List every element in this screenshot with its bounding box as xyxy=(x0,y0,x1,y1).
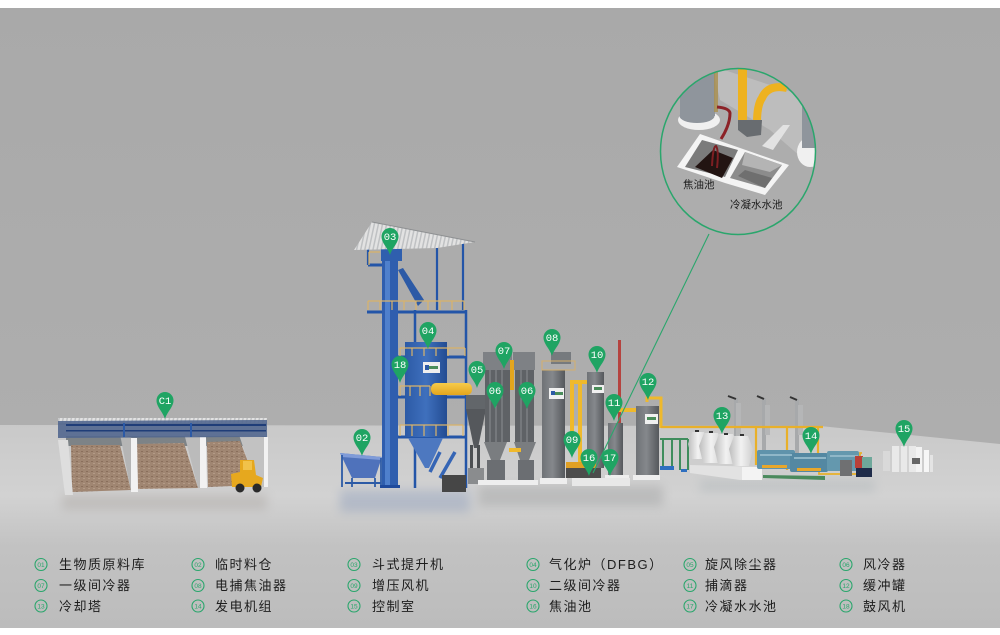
equipment: cooling towers xyxy=(688,430,762,480)
marker 03 xyxy=(382,228,398,255)
legend column 3: 15 xyxy=(350,604,358,610)
marker 17: 17 xyxy=(604,453,616,465)
marker 04: 04 xyxy=(422,326,434,338)
legend column 2: 电捕焦油器 xyxy=(215,578,288,593)
marker C1: C1 xyxy=(159,396,171,408)
marker 06 right: 06 xyxy=(521,386,533,398)
inset label: tar pool: 焦油池 xyxy=(683,178,715,191)
ash bin xyxy=(442,475,466,492)
legend column 6: 18 xyxy=(842,604,850,610)
yellow duct xyxy=(431,383,472,395)
equipment: green pipe rack xyxy=(660,439,688,472)
top margin xyxy=(0,0,1000,8)
equipment: control room xyxy=(883,446,933,472)
legend column 4: 二级间冷器 xyxy=(549,578,622,593)
inset label: condensate pool: 冷凝水水池 xyxy=(730,198,783,211)
condensate pool xyxy=(730,152,782,188)
railings xyxy=(368,252,465,436)
legend column 1: 01 xyxy=(37,562,45,569)
column 10 xyxy=(587,372,604,468)
marker 04 xyxy=(420,322,436,349)
legend column 5: 11 xyxy=(687,583,694,590)
equipment: primary and secondary coolers xyxy=(540,352,630,486)
marker 18 xyxy=(392,356,408,383)
legend column 4 xyxy=(527,557,664,614)
marker 13: 13 xyxy=(716,411,728,423)
legend column 6: 风冷器 xyxy=(863,557,907,572)
right tank xyxy=(797,106,815,167)
background floor xyxy=(0,425,1000,628)
marker 17 xyxy=(602,449,618,476)
equipment: biomass storage shed xyxy=(58,418,268,495)
marker 18: 18 xyxy=(394,360,406,372)
legend column 3: 09 xyxy=(350,583,358,590)
marker 16 xyxy=(580,449,598,476)
legend column 1: 07 xyxy=(37,583,45,590)
marker 03: 03 xyxy=(384,232,396,244)
marker 05 xyxy=(468,361,486,388)
marker 02 xyxy=(354,429,370,456)
marker 15: 15 xyxy=(898,424,910,436)
background wall xyxy=(0,8,1000,453)
legend column 5 xyxy=(684,557,778,614)
marker 05: 05 xyxy=(471,365,483,377)
legend column 5: 冷凝水水池 xyxy=(705,599,778,614)
gasifier body xyxy=(405,342,447,468)
marker 06 left: 06 xyxy=(489,386,501,398)
marker 10: 10 xyxy=(591,350,603,362)
bucket elevator xyxy=(380,247,402,488)
legend column 3: 斗式提升机 xyxy=(372,557,445,572)
legend column 6: 鼓风机 xyxy=(863,599,907,614)
legend column 2 xyxy=(192,557,288,614)
legend column 6 xyxy=(840,557,907,614)
leader line to inset xyxy=(593,234,709,473)
concrete strip xyxy=(762,125,790,150)
legend column 6: 缓冲罐 xyxy=(863,578,907,593)
bottom margin xyxy=(0,628,1000,635)
column 08 xyxy=(540,352,575,484)
pool walls xyxy=(677,134,789,195)
legend column 2: 14 xyxy=(194,604,202,610)
marker 14: 14 xyxy=(805,431,817,443)
marker 10 xyxy=(588,346,606,373)
marker 13 xyxy=(714,407,730,434)
legend column 2: 02 xyxy=(194,562,202,569)
red pipe xyxy=(717,107,730,139)
legend column 1: 冷却塔 xyxy=(59,599,103,614)
frame columns xyxy=(367,243,467,488)
marker 08: 08 xyxy=(546,333,558,345)
marker 07: 07 xyxy=(498,346,510,358)
legend column 4: 焦油池 xyxy=(549,599,593,614)
equipment: temporary hopper xyxy=(340,453,382,487)
marker C1 xyxy=(156,392,174,419)
marker 14 xyxy=(802,427,820,454)
legend column 3: 03 xyxy=(350,562,358,569)
equipment: air coolers xyxy=(478,352,538,485)
legend column 4: 10 xyxy=(529,583,537,590)
marker 12: 12 xyxy=(642,377,654,389)
floor tone xyxy=(718,70,814,168)
equipment: gasifier tower xyxy=(354,222,475,492)
marker 06 right xyxy=(518,382,536,409)
blower and pump skid xyxy=(566,462,630,486)
marker 08 xyxy=(544,329,560,356)
valve block xyxy=(738,120,762,137)
legend column 2: 发电机组 xyxy=(215,599,273,614)
legend xyxy=(35,557,907,614)
legend column 3: 控制室 xyxy=(372,599,416,614)
legend column 1: 13 xyxy=(37,604,45,610)
legend column 5: 05 xyxy=(686,562,694,569)
equipment: buffer tank xyxy=(633,398,661,480)
legend column 6: 06 xyxy=(842,562,850,569)
yellow pipes xyxy=(738,69,787,120)
legend column 5: 17 xyxy=(686,604,694,610)
equipment: main gas header xyxy=(661,427,823,472)
legend column 4: 04 xyxy=(529,562,537,569)
legend column 6: 12 xyxy=(842,583,850,590)
discharge screw xyxy=(430,452,455,478)
tar pool xyxy=(685,140,738,178)
legend column 1: 一级间冷器 xyxy=(59,578,132,593)
yellow gas ducts xyxy=(572,382,588,470)
legend column 4: 16 xyxy=(529,604,537,610)
left tank xyxy=(678,72,720,130)
marker 15 xyxy=(896,420,912,447)
marker 06 left xyxy=(486,382,504,409)
floor reflections xyxy=(62,480,875,512)
marker 09 xyxy=(564,431,580,458)
marker 02: 02 xyxy=(356,433,368,445)
roof xyxy=(354,222,475,250)
equipment: exhaust stacks xyxy=(728,396,803,461)
legend column 1 xyxy=(35,557,146,614)
legend column 1: 生物质原料库 xyxy=(59,557,146,572)
equipment: cyclone xyxy=(466,395,486,484)
legend column 3 xyxy=(348,557,445,614)
marker 16: 16 xyxy=(583,453,595,465)
inset: tar and condensate pools xyxy=(660,60,823,234)
legend column 2: 08 xyxy=(194,583,202,590)
legend column 4: 气化炉（DFBG） xyxy=(549,557,664,572)
legend column 3: 增压风机 xyxy=(372,578,430,593)
feed chute xyxy=(398,268,424,306)
legend column 5: 旋风除尘器 xyxy=(705,557,778,572)
marker 09: 09 xyxy=(566,435,578,447)
equipment: red flare stack xyxy=(618,340,621,472)
marker 11 xyxy=(606,394,622,421)
equipment: generator sets xyxy=(757,450,872,480)
equipment: droplet catcher xyxy=(605,410,636,478)
equipment: wheel loader xyxy=(231,460,263,492)
marker 12 xyxy=(640,373,656,400)
marker 07 xyxy=(496,342,512,369)
legend column 5: 捕滴器 xyxy=(705,578,749,593)
marker 11: 11 xyxy=(608,398,620,410)
legend column 2: 临时料仓 xyxy=(215,557,273,572)
